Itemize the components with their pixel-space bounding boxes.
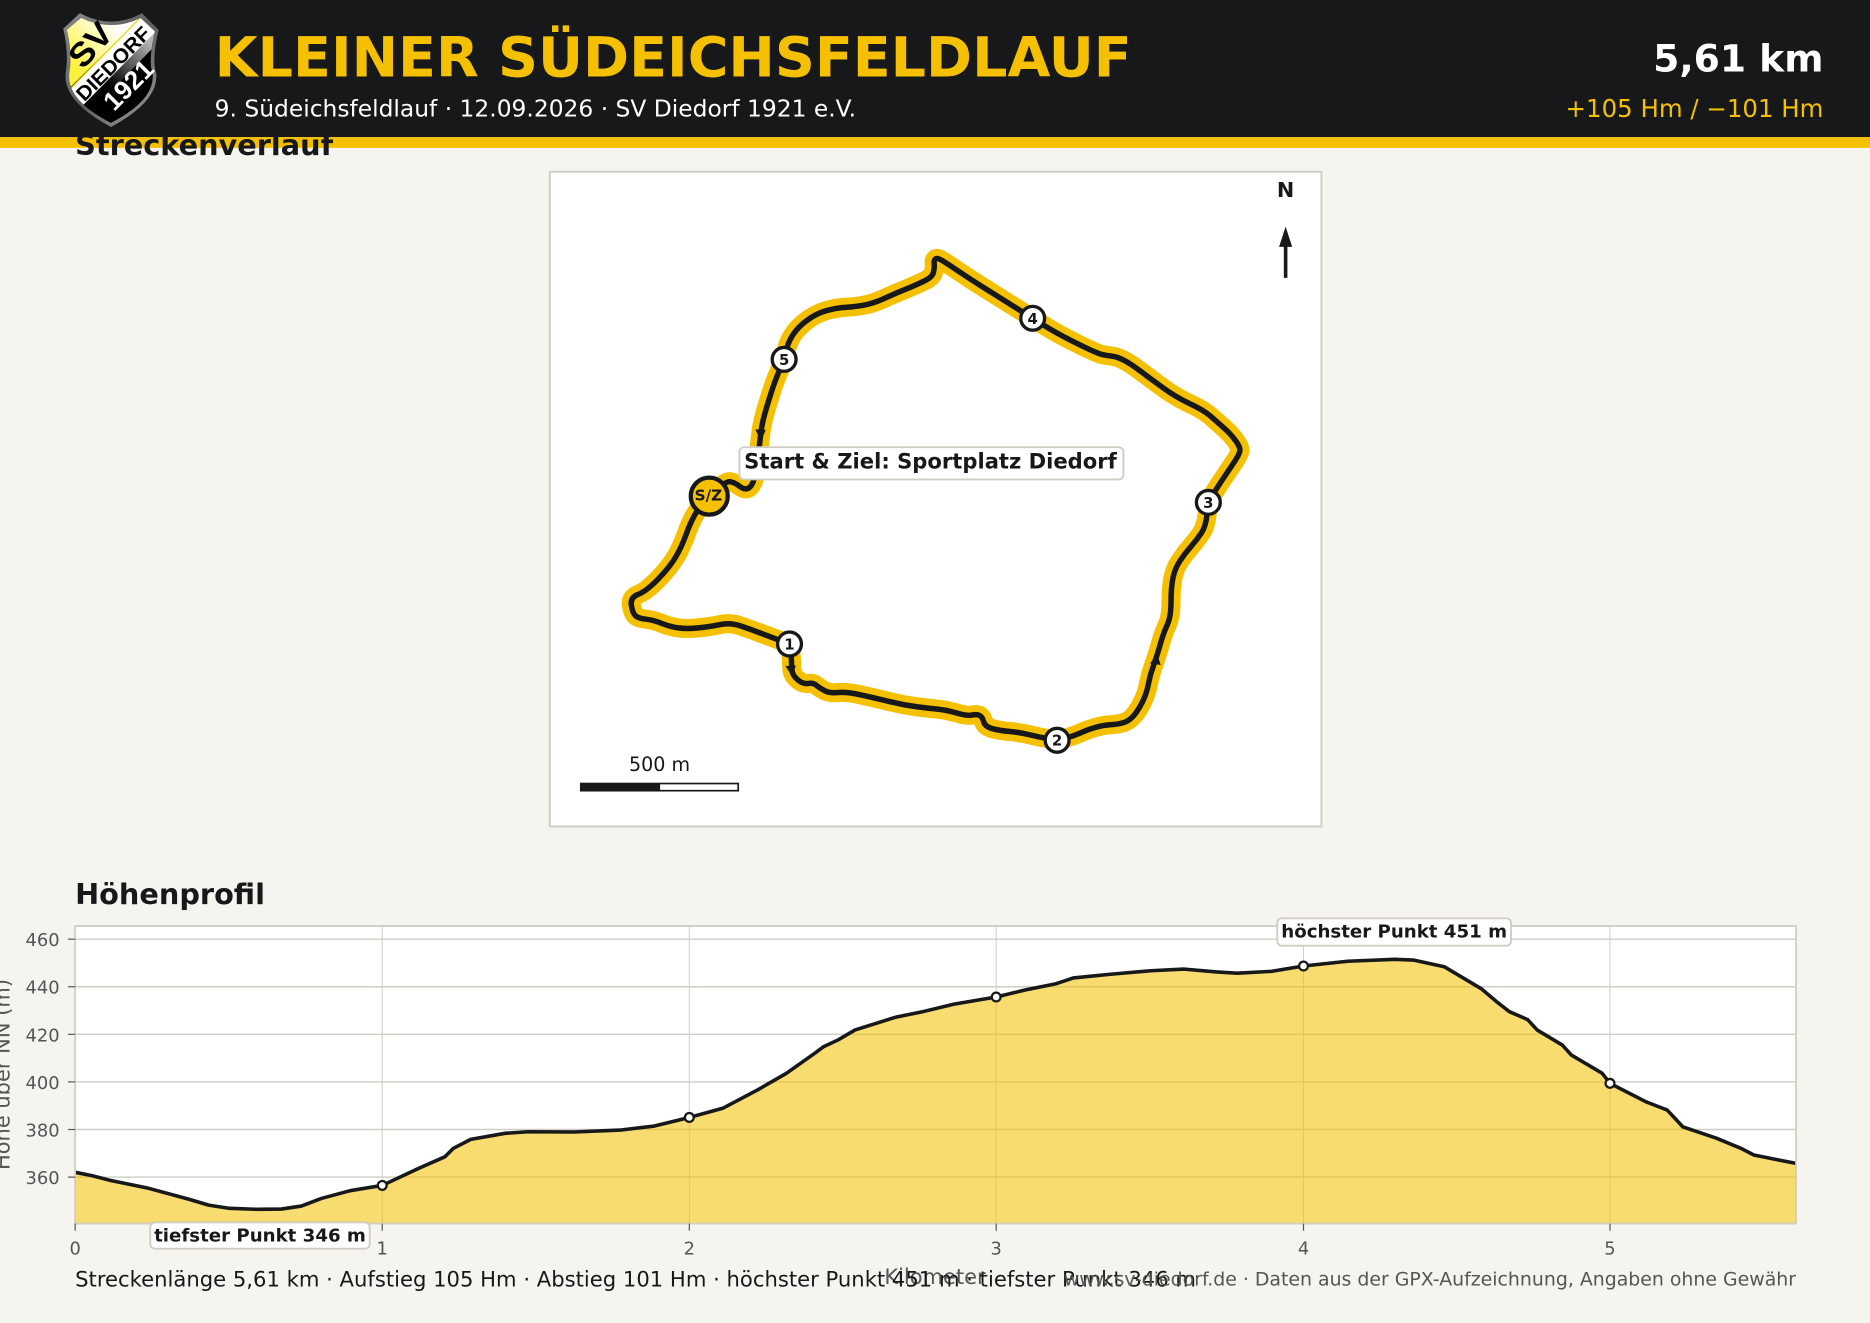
north arrow (1277, 178, 1294, 278)
km marker 3: 3 (1203, 494, 1214, 512)
direction arrows (755, 429, 1161, 677)
route line (631, 258, 1240, 739)
x axis ticks and labels: 2 (684, 1239, 695, 1260)
plot frame (75, 926, 1796, 1224)
header band (0, 0, 1870, 148)
km marker 4: 4 (1027, 310, 1038, 328)
scale bar: 500 m (629, 754, 690, 776)
y axis ticks and labels: 360 (26, 1168, 60, 1189)
north arrow: N (1277, 178, 1294, 202)
heading: Streckenverlauf: Streckenverlauf (75, 128, 334, 162)
start and finish marker: S/Z (695, 486, 722, 504)
logo: SV Diedorf shield: SV (61, 15, 121, 76)
scale bar (581, 754, 738, 791)
y axis ticks and labels: 440 (26, 978, 60, 999)
y axis ticks and labels: 420 (26, 1025, 60, 1046)
callout: lowest point: tiefster Punkt 346 m (154, 1225, 366, 1246)
x axis title: Kilometer (884, 1265, 986, 1289)
callout: highest point: höchster Punkt 451 m (1281, 921, 1507, 942)
chart: elevation profile (0, 918, 1796, 1289)
title: KLEINER SÜDEICHSFELDLAUF (215, 25, 1132, 90)
subtitle: 9. Südeichsfeldlauf · 12.09.2026 · SV Diedorf 1921 e.V. (215, 94, 856, 122)
km marker 5 (772, 347, 796, 371)
heading: Höhenprofil: Höhenprofil (75, 877, 265, 911)
x axis ticks and labels: 5 (1604, 1239, 1616, 1260)
logo: SV Diedorf shield: DIEDORF (72, 23, 155, 106)
km marker 4 (1021, 306, 1045, 330)
x axis ticks and labels: 3 (990, 1239, 1002, 1260)
footer: route statistics: Streckenlänge 5,61 km · Aufstieg 105 Hm · Abstieg 101 Hm · höchster Punkt 451 m · tiefster Punkt 346 m (75, 1266, 1196, 1291)
km marker 1 (778, 632, 801, 656)
distance: 5,61 km (1653, 37, 1823, 81)
km marker 5: 5 (779, 351, 789, 369)
y axis ticks and labels: 380 (26, 1120, 60, 1141)
callout: start and finish: Start & Ziel: Sportplatz Diedorf (744, 449, 1118, 474)
x axis ticks and labels: 4 (1298, 1239, 1309, 1260)
footer: source note: www.sv-diedorf.de · Daten aus der GPX-Aufzeichnung, Angaben ohne Gewähr (1064, 1269, 1796, 1291)
elevation gain and loss: +105 Hm / −101 Hm (1566, 94, 1823, 123)
y axis ticks and labels: 400 (26, 1073, 60, 1094)
km marker 2 (1045, 728, 1069, 752)
logo: SV Diedorf shield: 1921 (97, 54, 160, 116)
elevation line (75, 959, 1796, 1209)
y axis ticks and labels (26, 930, 75, 1189)
panel: route map (550, 172, 1321, 826)
x axis ticks and labels: 1 (377, 1239, 388, 1260)
x axis ticks and labels: 0 (69, 1239, 81, 1260)
km marker 3 (1196, 490, 1220, 514)
x axis ticks and labels (69, 1224, 1616, 1260)
start and finish marker (691, 478, 728, 515)
elevation area (75, 959, 1796, 1224)
y axis ticks and labels: 460 (26, 930, 60, 951)
km marker 1: 1 (784, 635, 795, 653)
kilometre points on profile (378, 962, 1614, 1190)
km marker 2: 2 (1052, 732, 1062, 750)
logo: SV Diedorf shield (63, 13, 158, 127)
